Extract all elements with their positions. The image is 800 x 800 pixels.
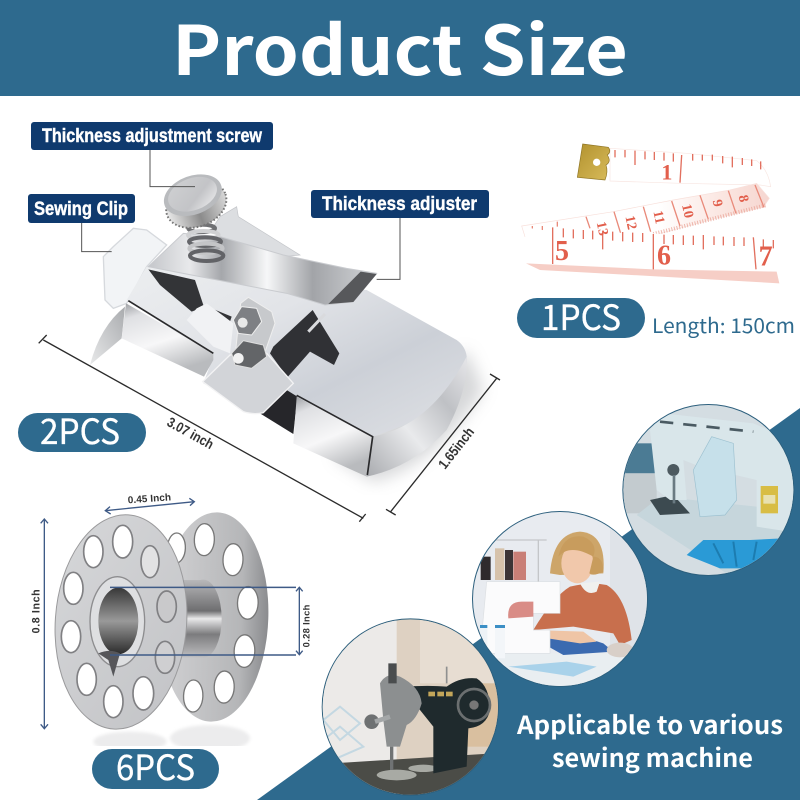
small pin — [308, 314, 325, 332]
header banner — [0, 0, 800, 96]
tape numerals: 8 — [735, 194, 751, 204]
tape numerals — [555, 159, 773, 272]
bobbin reflection — [93, 725, 250, 752]
thread notch — [98, 651, 120, 677]
tape ticks middle — [532, 185, 767, 235]
base plate top — [127, 267, 467, 437]
tape numerals: 9 — [709, 198, 725, 208]
caption: Applicable to various — [516, 706, 783, 742]
label: 0.8 inch: 0.8 Inch — [30, 589, 42, 633]
center bore — [98, 588, 138, 654]
label: width value: 1.65inch — [435, 424, 477, 472]
dimension line: length — [39, 335, 366, 522]
dark window left — [148, 269, 232, 322]
black notch — [260, 390, 297, 434]
dimension guide lines — [110, 587, 296, 655]
tape numerals: 6 — [657, 241, 671, 272]
quantity pill: 6PCS — [92, 740, 219, 791]
callout: thickness adjuster — [311, 190, 489, 218]
base front left — [122, 303, 213, 377]
tape numerals: 10 — [678, 203, 696, 220]
length note: Length: 150cm — [652, 310, 795, 339]
tape ticks front — [553, 227, 773, 269]
quantity pill: 2PCS: 2PCS — [40, 404, 120, 455]
quantity pill: 1PCS — [517, 290, 645, 341]
label: 0.28 inch: 0.28 Inch — [301, 604, 311, 647]
photo: woman sewing — [470, 510, 650, 690]
caption — [516, 706, 783, 775]
soft product shadow — [333, 350, 483, 482]
label: 0.45 inch: 0.45 Inch — [127, 492, 171, 506]
photo: vintage sewing machine — [320, 617, 507, 797]
tape ticks top — [615, 150, 761, 183]
lower folded plate — [203, 353, 293, 414]
panel: application photos — [320, 400, 800, 797]
dimension arrow: height — [41, 519, 48, 729]
tape middle band — [522, 183, 769, 237]
pale inner wedge — [187, 303, 233, 353]
dark window right — [270, 310, 339, 377]
upper bolt — [233, 307, 262, 335]
leader lines — [82, 150, 400, 279]
front disc holes — [61, 525, 176, 718]
tape numerals: 5 — [555, 236, 569, 267]
spring plate — [148, 233, 377, 305]
brass tip — [577, 144, 610, 180]
dark spring tip — [328, 272, 377, 304]
tape numerals: 1 — [661, 159, 672, 184]
bobbin core — [160, 580, 222, 658]
tape numerals: 12 — [621, 214, 639, 231]
base front right — [293, 397, 372, 477]
knurled knob — [157, 166, 233, 236]
callout: thickness adjustment screw — [31, 122, 273, 150]
tape numerals: 7 — [759, 241, 773, 272]
back disc — [156, 511, 272, 724]
lower bolt — [232, 341, 267, 368]
adjuster washer — [235, 297, 275, 365]
blue diagonal background panel — [257, 408, 800, 800]
center ring — [90, 577, 145, 667]
callout: thickness adjustment screw: Thickness adjustment screw — [42, 126, 262, 147]
panel: magnetic seam guide — [39, 150, 500, 522]
tape front band — [525, 227, 783, 284]
rear flange of spring plate — [213, 207, 300, 257]
quantity pill: 2PCS — [18, 404, 146, 455]
callout: thickness adjuster: Thickness adjuster — [322, 194, 478, 215]
quantity pill: 6PCS: 6PCS — [116, 740, 195, 791]
callout: sewing clip: Sewing Clip — [34, 199, 128, 220]
callout: sewing clip — [28, 194, 135, 223]
panel: measuring tape — [522, 144, 783, 284]
caption: sewing machine — [552, 739, 753, 775]
quantity pill: 1PCS: 1PCS — [541, 290, 621, 341]
tape pink underside — [526, 263, 779, 283]
dark edges — [128, 301, 373, 475]
tape numerals: 13 — [593, 220, 610, 237]
half round guide — [90, 307, 125, 365]
dimension arrow: inner — [296, 587, 303, 655]
rounded right edge — [367, 357, 467, 477]
front disc — [48, 510, 194, 734]
sewing clip fin — [103, 228, 167, 308]
label: length value: 3.07 inch — [165, 414, 217, 452]
tape top band — [610, 148, 771, 187]
panel: metal bobbin — [30, 492, 311, 759]
tape numerals: 11 — [649, 209, 667, 225]
brass hole — [593, 159, 600, 166]
dimension arrow: depth — [105, 498, 194, 514]
spring coil — [188, 225, 223, 261]
photo: industrial sewing machine — [622, 404, 794, 576]
dimension line: width — [386, 374, 500, 515]
